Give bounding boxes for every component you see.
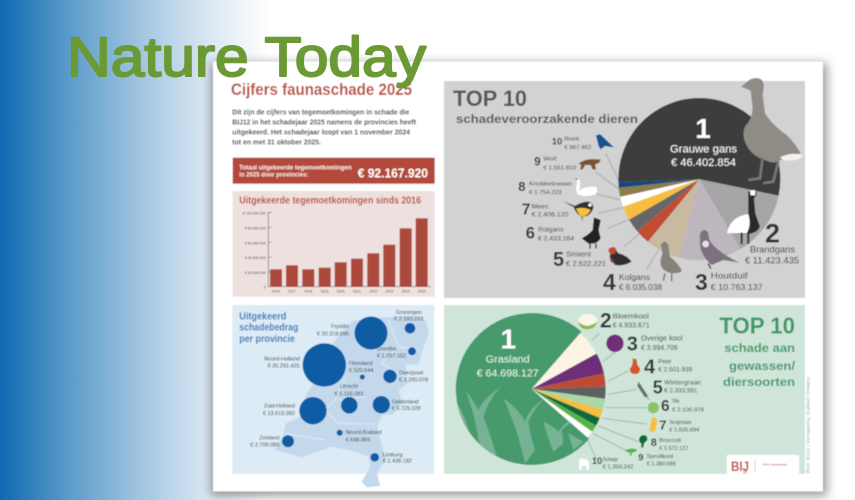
- province labels: € 20.318.695: [317, 331, 349, 337]
- crops heading: gewassen/: [729, 359, 796, 373]
- panel: bar chart since 2016: 2017: [288, 290, 296, 294]
- crop labels: Snijmais: [669, 420, 692, 426]
- animal labels: € 967.462: [564, 145, 591, 151]
- BIJ12 logo: BIJ: [731, 458, 749, 474]
- intro text block: BIJ12 in het schadejaar 2025 namens de provincies heeft: [232, 117, 416, 126]
- animals heading: TOP 10: [453, 86, 527, 111]
- intro text block: [232, 107, 416, 146]
- panel: bar chart since 2016: € 60.000.000: [245, 241, 266, 245]
- panel: bar chart since 2016: 2022: [369, 290, 377, 294]
- province labels: Fryslân: [331, 324, 349, 330]
- icon: knobbelzwaan: [575, 178, 597, 196]
- province labels: € 1.297.152: [377, 354, 406, 360]
- animal labels: Wolf: [543, 157, 557, 163]
- icon: wolf: [579, 159, 601, 169]
- panel: bar chart since 2016: 2023: [385, 290, 393, 294]
- crop labels: € 2.333.991: [664, 388, 698, 394]
- crop labels: Schaap: [603, 457, 618, 463]
- map heading: [239, 311, 298, 345]
- icon: houtduif: [700, 230, 739, 269]
- total banner: in 2025 door provincies:: [239, 172, 308, 179]
- crop labels: € 4.933.671: [613, 322, 650, 329]
- animal labels: € 1.551.602: [543, 165, 576, 171]
- animal labels: 8: [518, 179, 526, 194]
- panel: bar chart since 2016: 2016: [272, 290, 280, 294]
- crop labels: Wintergraan: [664, 380, 701, 386]
- crop labels: € 2.501.939: [658, 368, 693, 374]
- background gradient: [0, 0, 270, 500]
- panel: map by province: [232, 305, 434, 487]
- total banner: Totaal uitgekeerde tegemoetkomingen: [239, 164, 352, 171]
- crop labels: 10: [592, 456, 602, 467]
- intro text block: Dit zijn de cijfers van tegemoetkomingen in schade die: [232, 107, 409, 116]
- pie label: Grauwe gans: € 46.402.854: [671, 157, 736, 169]
- panel: top 10 animals: [444, 78, 805, 298]
- animal labels: Brandgans: [750, 244, 796, 254]
- icon: rotgans: [582, 217, 601, 249]
- crop labels: Broccoli: [659, 438, 681, 444]
- crops leader lines: [587, 333, 649, 459]
- crop labels: € 3.994.706: [641, 345, 678, 352]
- grass illustration: [455, 387, 583, 463]
- icon: sla: [648, 402, 659, 413]
- icon: smient: [608, 247, 632, 265]
- crop labels: 7: [659, 417, 667, 432]
- province labels: Noord-Brabant: [346, 430, 382, 436]
- province labels: Noord-Holland: [264, 357, 300, 363]
- icon: peer: [630, 358, 640, 374]
- map of the Netherlands: [275, 316, 429, 487]
- crops heading: schade aan: [724, 341, 795, 355]
- crop labels: Sla: [672, 399, 680, 405]
- province labels: Drenthe: [377, 347, 397, 353]
- crop labels: € 1.380.089: [647, 462, 676, 468]
- crop labels: 4: [644, 356, 656, 378]
- panel: bar chart since 2016: 2018: [304, 290, 312, 294]
- panel: bar chart since 2016: € 20.000.000: [245, 271, 266, 275]
- icon: wintergraan: [637, 382, 648, 397]
- crop labels: 3: [627, 334, 638, 356]
- crop labels: Bloemkool: [613, 313, 649, 320]
- icon: spruitkool: [625, 449, 637, 456]
- province labels: € 35.291.425: [268, 364, 300, 370]
- province labels: € 5.725.028: [392, 406, 421, 412]
- icon: grauwe gans: [741, 78, 803, 183]
- animal labels: Rotgans: [538, 227, 564, 234]
- panel: bar chart since 2016: 2025: [418, 290, 426, 294]
- icon: bloemkool: [578, 314, 597, 329]
- animal labels: € 10.763.137: [711, 282, 763, 292]
- icon: overige kool: [606, 335, 624, 352]
- intro text block: tot en met 31 oktober 2025.: [232, 137, 321, 146]
- animal labels: € 2.522.221: [566, 261, 606, 268]
- BIJ12 logo: 12: [743, 470, 747, 474]
- animal labels: 3: [695, 269, 708, 295]
- icon: broccoli: [639, 435, 648, 448]
- BIJ12 logo: BIJ12 faunaschade: [763, 462, 787, 466]
- pie label: Grasland: 1: [501, 323, 516, 354]
- province labels: Overijssel: [399, 371, 423, 377]
- province labels: Gelderland: [392, 399, 419, 405]
- icon: schaap: [579, 458, 589, 470]
- province labels: Zuid-Holland: [264, 404, 295, 410]
- animal labels: Kolgans: [619, 273, 650, 282]
- province labels: € 2.709.089: [250, 443, 279, 449]
- animal labels: [518, 136, 799, 295]
- animal labels: 4: [603, 269, 616, 295]
- province labels: € 648.869: [346, 437, 370, 443]
- animal labels: Smient: [566, 252, 591, 259]
- pie label: Grauwe gans: [670, 113, 737, 169]
- province labels: Utrecht: [340, 384, 358, 390]
- pie label: Grauwe gans: Grauwe gans: [670, 144, 737, 156]
- province labels: Flevoland: [349, 361, 373, 367]
- province labels: € 2.193.293: [394, 317, 423, 323]
- crop labels: Peer: [658, 359, 671, 365]
- animal labels: Mees: [532, 203, 549, 210]
- panel: bar chart since 2016: 2021: [353, 290, 361, 294]
- icon: snijmais: [649, 417, 657, 432]
- map heading: per provincie: [239, 334, 295, 345]
- panel: bar chart since 2016: 2019: [321, 290, 329, 294]
- animal labels: Roek: [564, 137, 580, 143]
- map heading: schadebedrag: [239, 323, 298, 334]
- crop labels: € 1.350.242: [603, 464, 633, 470]
- province labels: € 5.116.083: [335, 391, 363, 397]
- panel: bar chart since 2016: € 40.000.000: [245, 256, 266, 260]
- panel: bar chart since 2016: 2020: [337, 290, 345, 294]
- panel: bar chart since 2016: € 100.000.000: [243, 212, 266, 216]
- crop icons: [578, 314, 659, 470]
- crop labels: € 2.100.978: [672, 408, 704, 414]
- animals heading: schadeveroorzakende dieren: [456, 114, 638, 126]
- BIJ12 logo: [727, 455, 799, 474]
- intro text block: uitgekeerd. Het schadejaar loopt van 1 november 2024: [232, 127, 411, 136]
- card shadow: [211, 63, 827, 496]
- province labels: € 13.619.382: [263, 411, 295, 417]
- animal labels: Knobbelzwaan: [529, 182, 572, 188]
- animal labels: € 11.423.435: [745, 255, 799, 265]
- credit line: Bron: BIJ12 | Vormgeving: Grafisch Ontwerp: [806, 376, 810, 473]
- crop labels: 5: [653, 377, 663, 397]
- infographic card: [213, 62, 823, 492]
- pie label: Grasland: Grasland: [486, 354, 530, 365]
- pie label: Grasland: [477, 323, 539, 380]
- crops heading: TOP 10: [719, 312, 795, 338]
- panel: bar chart since 2016: € 80.000.000: [245, 226, 266, 230]
- animal labels: 7: [522, 201, 530, 218]
- province bubbles: [282, 316, 416, 462]
- animals pie chart: [618, 98, 780, 260]
- animal labels: € 6.035.038: [619, 283, 663, 292]
- crops heading: diersoorten: [723, 375, 795, 389]
- animal labels: Houtduif: [711, 270, 748, 280]
- province labels: € 520.644: [349, 368, 373, 374]
- icon: kolgans: [660, 242, 682, 281]
- panel: bar chart since 2016: 2024: [402, 290, 410, 294]
- crop labels: Spruitkool: [647, 454, 673, 460]
- animal labels: € 2.433.164: [538, 236, 574, 243]
- crop labels: € 1.572.127: [659, 446, 688, 452]
- total banner: € 92.167.920: [358, 166, 428, 180]
- panel: bar chart since 2016: Uitgekeerde tegemoetkomingen sinds 2016: [239, 195, 421, 206]
- province labels: Limburg: [383, 452, 403, 458]
- animal labels: € 1.754.223: [529, 190, 562, 196]
- province labels: Zeeland: [259, 435, 279, 441]
- icon: mees: [563, 201, 593, 220]
- province labels: [250, 310, 428, 465]
- panel: top 10 crops: [444, 305, 810, 474]
- province labels: € 3.290.078: [399, 377, 428, 383]
- map heading: Uitgekeerd: [239, 311, 286, 322]
- crop labels: Overige kool: [641, 336, 683, 343]
- crop labels: [592, 309, 704, 470]
- crop labels: 2: [600, 309, 612, 332]
- total banner: [233, 158, 435, 184]
- animals leader lines: [595, 153, 658, 269]
- crops pie chart: [456, 313, 606, 465]
- pie label: Grauwe gans: 1: [695, 113, 711, 144]
- animal labels: 5: [553, 249, 564, 271]
- animal labels: 9: [534, 157, 541, 169]
- province labels: Groningen: [396, 310, 422, 316]
- icon: brandgans: [727, 189, 760, 244]
- heading: Cijfers faunaschade 2025: Cijfers faunaschade 2025: [231, 81, 412, 99]
- animal labels: 10: [552, 136, 562, 147]
- pie label: Grasland: € 64.698.127: [477, 369, 539, 380]
- panel: bar chart since 2016: 0: [264, 286, 266, 290]
- panel: bar chart since 2016: [233, 191, 435, 297]
- crops heading: [719, 312, 796, 389]
- crop labels: € 1.635.694: [669, 428, 699, 434]
- animal labels: 2: [765, 219, 780, 249]
- animal labels: € 2.406.120: [532, 212, 569, 219]
- crop labels: 9: [638, 453, 644, 464]
- crop labels: 8: [651, 437, 657, 449]
- animal labels: 6: [526, 224, 535, 242]
- crop labels: 6: [661, 398, 670, 415]
- logo: Nature Today: Nature Today: [67, 25, 426, 88]
- animals heading: [453, 86, 638, 126]
- province labels: € 1.438.182: [383, 459, 412, 465]
- icon: roek: [596, 134, 614, 149]
